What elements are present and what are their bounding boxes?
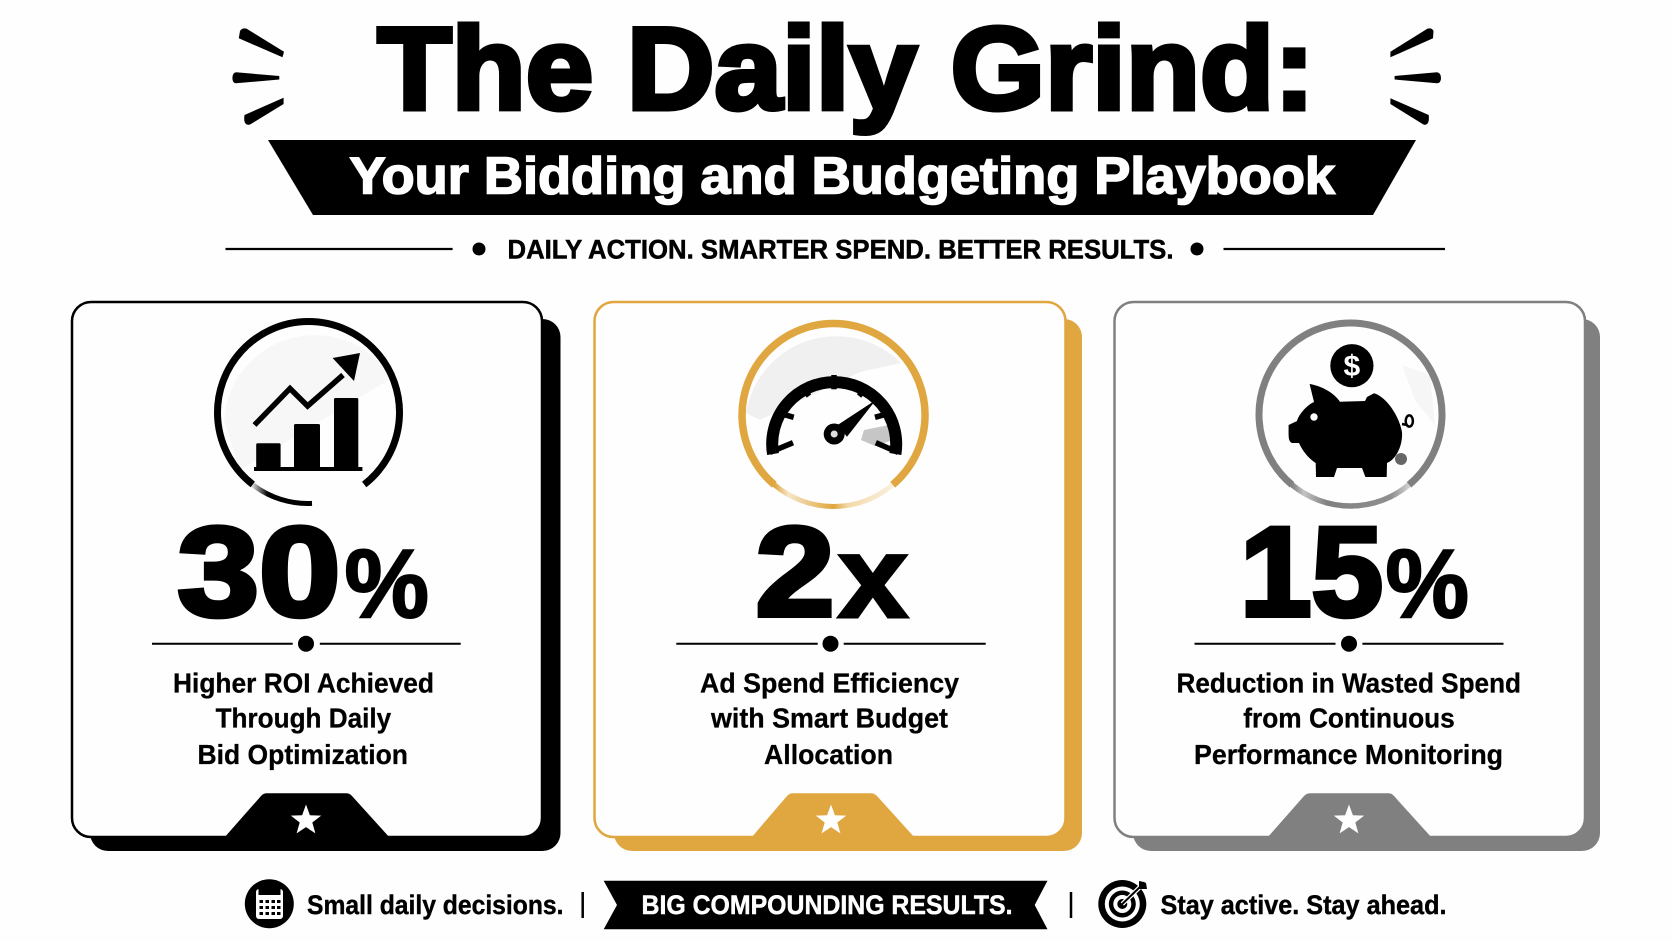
panel: 2x ad spend efficiency [594, 302, 1082, 851]
card body [594, 302, 1066, 837]
tab with star [751, 793, 915, 838]
separator left [581, 892, 584, 918]
stat: 30%: % [344, 529, 429, 638]
header [226, 3, 1445, 264]
icon: piggy bank in circle: $ [1344, 350, 1361, 383]
tab with star [1267, 793, 1432, 838]
divider [676, 636, 986, 652]
description: from Continuous [1243, 703, 1455, 734]
subtitle banner: Your Bidding and Budgeting Playbook [350, 148, 1335, 206]
tab with star [224, 793, 390, 838]
description: Higher ROI Achieved [173, 667, 434, 698]
card shadow [90, 319, 560, 851]
subtitle banner [268, 140, 1416, 215]
description: Reduction in Wasted Spend [1176, 667, 1521, 698]
separator right [1070, 892, 1072, 918]
divider [152, 636, 461, 652]
stat: 15%: % [1386, 529, 1469, 638]
stat: 2x [756, 500, 908, 642]
icon: calendar [245, 879, 294, 928]
icon: target [1098, 880, 1147, 928]
divider [1194, 636, 1504, 652]
panel: 15% reduction in wasted spend [1114, 302, 1600, 851]
title: The Daily Grind: [378, 3, 1314, 134]
footer strip [245, 879, 1446, 929]
description: Bid Optimization [198, 739, 408, 770]
icon: piggy bank in circle [1259, 323, 1442, 506]
icon: left accent rays [232, 28, 284, 125]
card body [1114, 302, 1585, 837]
footer text left: Small daily decisions. [307, 890, 564, 920]
tagline [226, 234, 1445, 264]
stat: 30% [178, 500, 429, 642]
description: Allocation [764, 739, 893, 770]
card shadow [1133, 319, 1600, 851]
panel: 30% higher ROI [72, 302, 560, 851]
icon: growth chart in circle [218, 322, 400, 503]
icon: right accent rays [1390, 28, 1441, 125]
stat: 15%: 15 [1240, 500, 1383, 642]
description: Ad Spend Efficiency [700, 667, 959, 698]
card body [72, 302, 542, 837]
stat: 30%: 30 [178, 500, 340, 642]
card shadow [614, 319, 1082, 851]
description: with Smart Budget [710, 703, 948, 734]
description [1176, 667, 1521, 770]
ribbon: BIG COMPOUNDING RESULTS. [642, 890, 1012, 920]
stat: 2x: x [838, 512, 908, 642]
icon: speedometer in circle [742, 323, 925, 506]
description: Performance Monitoring [1194, 739, 1503, 770]
description: Through Daily [216, 703, 392, 734]
description [173, 667, 434, 770]
tagline: DAILY ACTION. SMARTER SPEND. BETTER RESULTS. [508, 234, 1174, 264]
ribbon [604, 881, 1048, 929]
stat: 15% [1240, 500, 1469, 642]
footer text right: Stay active. Stay ahead. [1160, 890, 1446, 920]
stat: 2x: 2 [756, 500, 834, 642]
description [700, 667, 959, 770]
